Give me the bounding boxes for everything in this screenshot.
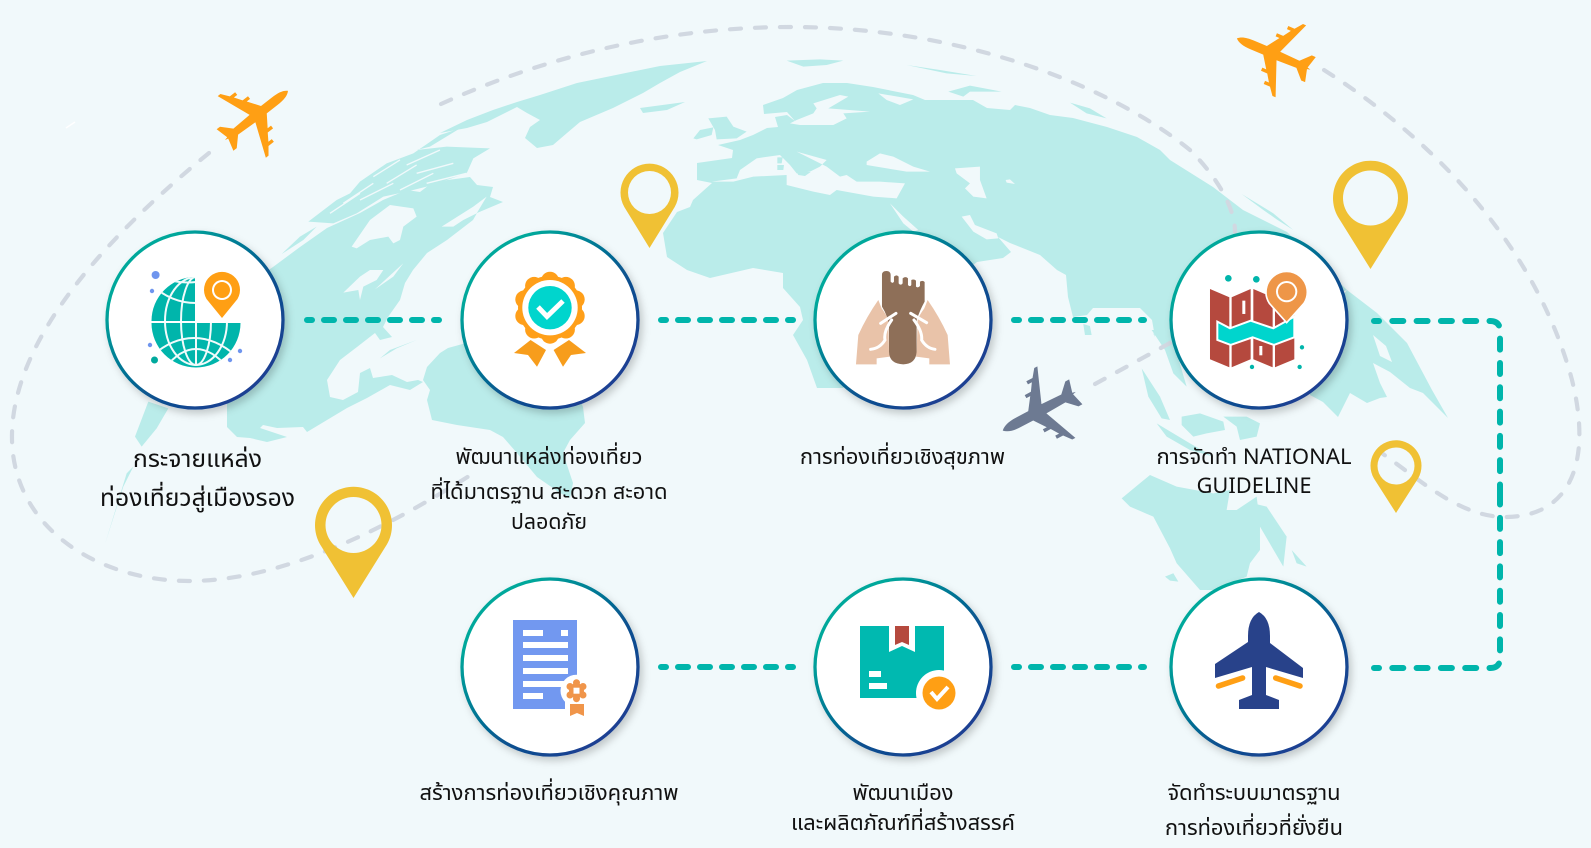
icon: folded map with pin <box>1210 271 1307 369</box>
icon: award badge <box>514 272 586 367</box>
map: Hudson Bay <box>352 205 417 248</box>
airplane: orange left <box>201 60 312 171</box>
label: การจัดทำ NATIONAL <box>1156 441 1352 474</box>
circle <box>815 579 991 755</box>
step 1: distribute tourism to secondary cities <box>100 232 295 517</box>
step 2: develop standard, clean, safe attractions <box>430 232 668 539</box>
label: สร้างการท่องเที่ยวเชิงคุณภาพ <box>420 777 679 810</box>
map: Arctic islands <box>282 128 490 300</box>
label: และผลิตภัณฑ์ที่สร้างสรรค์ <box>791 807 1015 840</box>
icon: globe with pin <box>148 270 242 368</box>
label <box>791 777 1015 840</box>
label: กระจายแหล่ง <box>133 442 262 478</box>
icon: airplane <box>1215 612 1303 709</box>
step 3: health tourism <box>800 232 1005 474</box>
map: Southeast Asia and Australia <box>1122 330 1307 590</box>
label: การท่องเที่ยวเชิงสุขภาพ <box>800 441 1005 474</box>
icon: hands massaging foot <box>856 271 950 364</box>
step 6: city and creative product development <box>791 579 1015 840</box>
label: พัฒนาแหล่งท่องเที่ยว <box>456 441 642 474</box>
step 4: national guideline <box>1156 232 1352 503</box>
icon: parcel with check <box>860 626 962 716</box>
step 5: sustainable tourism standard system <box>1165 579 1347 845</box>
circle <box>1171 579 1347 755</box>
map: Sri Lanka <box>1083 324 1092 335</box>
label: ที่ได้มาตรฐาน สะดวก สะอาด <box>430 476 668 509</box>
connector: step 4 to 5 <box>1374 321 1500 668</box>
flight route: left arc <box>12 153 477 581</box>
circle <box>1171 232 1347 408</box>
location pin: upper right <box>1333 161 1408 269</box>
flight route: top arc <box>441 27 1235 232</box>
connector: step 2 to 3 <box>661 317 793 323</box>
icon: certificate document <box>513 620 592 718</box>
step 7: quality tourism <box>420 579 679 810</box>
flight route: centre line <box>1095 343 1170 384</box>
map: South America <box>423 320 585 498</box>
label <box>430 441 668 539</box>
world map <box>105 59 1448 590</box>
map: East Asian strait <box>1373 335 1392 362</box>
label <box>1165 777 1343 845</box>
map: Mediterranean islands <box>777 157 811 176</box>
location pin: lower left <box>315 487 392 598</box>
label: ท่องเที่ยวสู่เมืองรอง <box>100 481 295 517</box>
location pin: top centre <box>620 164 678 248</box>
circle <box>815 232 991 408</box>
label: พัฒนาเมือง <box>852 777 954 810</box>
circle <box>107 232 283 408</box>
map: Greenland <box>440 61 707 148</box>
airplane: grey centre <box>984 356 1095 466</box>
map: Caribbean and streaks <box>105 340 417 544</box>
label <box>1156 441 1352 503</box>
map: East Asian islands <box>1300 290 1448 418</box>
location pin: right <box>1370 440 1422 513</box>
connector: step 1 to 2 <box>307 317 439 323</box>
map: Great Lakes <box>343 263 403 300</box>
circle <box>462 232 638 408</box>
small white mark <box>66 122 75 128</box>
label: ปลอดภัย <box>511 506 587 539</box>
map: Iceland <box>640 102 685 113</box>
connector: step 6 to 7 <box>661 664 793 670</box>
circle <box>462 579 638 755</box>
map: Eurasia and Africa <box>663 83 1347 388</box>
label: การท่องเที่ยวที่ยั่งยืน <box>1165 812 1343 845</box>
label: GUIDELINE <box>1196 470 1312 503</box>
map: North America <box>195 177 503 442</box>
map: Arctic Eurasian islands <box>787 59 1107 118</box>
flight route: right arc <box>1324 70 1579 517</box>
map: Northeast islets <box>1242 194 1293 230</box>
map: British Isles <box>693 117 747 139</box>
map: Mediterranean, Baltic and inland seas <box>693 59 1107 239</box>
airplane: orange right <box>1222 2 1326 106</box>
connector: step 5 to 6 <box>1014 664 1144 670</box>
connector: step 3 to 4 <box>1014 317 1144 323</box>
map: Gulf of St Lawrence <box>442 197 487 227</box>
label: จัดทำระบบมาตรฐาน <box>1168 777 1340 810</box>
label <box>100 442 295 517</box>
